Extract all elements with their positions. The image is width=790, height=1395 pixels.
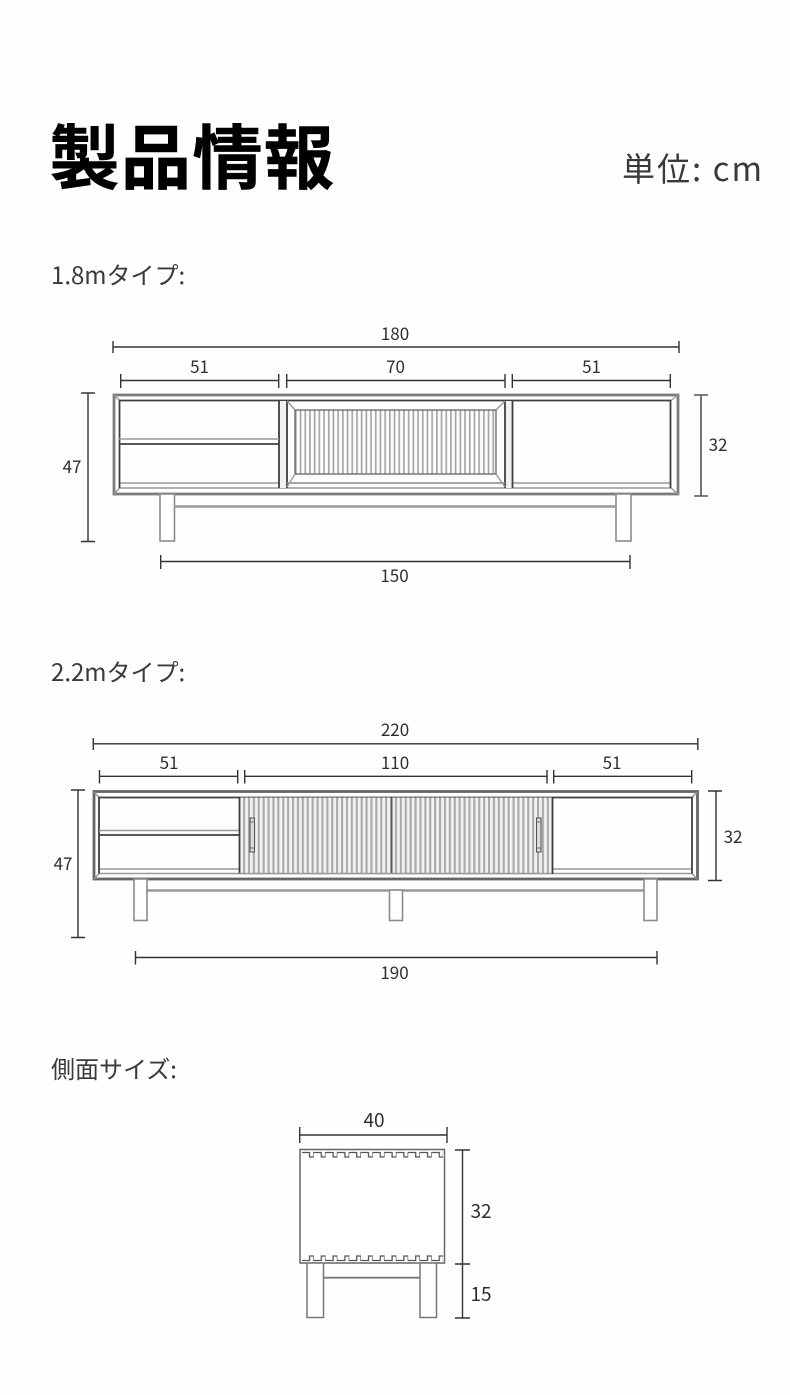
legs and stretcher 1.8m	[160, 494, 631, 541]
dimension 32 and 15	[455, 1150, 492, 1318]
dimension 51 left	[121, 353, 279, 388]
top toothed groove	[302, 1151, 443, 1158]
unit label: 単位: cm	[622, 143, 762, 191]
dimension 51 left: 51	[160, 749, 178, 774]
heading: side size: 側面サイズ:	[51, 1050, 177, 1085]
door handle left	[250, 818, 254, 852]
dimension 51 right: 51	[603, 749, 621, 774]
dimension 180	[113, 320, 679, 353]
diagram: side view	[300, 1106, 492, 1318]
dimension 70: 70	[386, 353, 405, 378]
dimension 220	[93, 716, 698, 750]
dimension 190: 190	[380, 959, 409, 984]
fluted centre door	[287, 401, 505, 487]
diagram: 1.8m cabinet front view	[63, 320, 727, 587]
dimension 220: 220	[381, 716, 409, 741]
cabinet body 1.8m	[114, 395, 678, 494]
dimension 51 left: 51	[190, 353, 209, 378]
door handle right	[536, 818, 541, 852]
side legs and stretcher	[307, 1263, 436, 1318]
dimension 51 right	[554, 749, 692, 784]
cabinet side body	[300, 1150, 444, 1263]
dimension 32 and 15: 32	[470, 1197, 492, 1224]
dimension 47	[63, 393, 95, 542]
dimension 70	[287, 353, 505, 388]
dimension 47: 47	[63, 453, 81, 478]
dimension 150: 150	[380, 562, 409, 587]
title: 製品情報	[50, 103, 336, 204]
dimension 150	[161, 555, 630, 587]
cabinet body 2.2m	[94, 792, 698, 879]
dimension 32 and 15: 15	[470, 1280, 492, 1307]
dimension 190	[136, 951, 657, 984]
dimension 51 right: 51	[582, 353, 601, 378]
dimension 47: 47	[54, 850, 72, 875]
dimension 32: 32	[709, 431, 727, 456]
heading: 2.2m type: 2.2mタイプ:	[51, 653, 185, 688]
dimension 51 left	[100, 749, 238, 784]
dimension 47	[54, 790, 85, 938]
dimension 32: 32	[724, 823, 742, 848]
dimension 32	[708, 791, 742, 880]
diagram: 2.2m cabinet front view	[54, 716, 742, 984]
dimension 110: 110	[381, 749, 409, 774]
dimension 32	[694, 395, 727, 496]
dimension 40: 40	[363, 1106, 385, 1133]
dimension 180: 180	[381, 320, 409, 345]
dimension 110	[245, 749, 547, 784]
bottom toothed groove	[302, 1255, 443, 1262]
heading: 1.8m type: 1.8mタイプ:	[51, 256, 185, 291]
sliding fluted doors	[239, 797, 552, 874]
dimension 40	[300, 1106, 447, 1143]
legs and stretcher 2.2m	[134, 879, 657, 920]
dimension 51 right	[512, 353, 670, 388]
